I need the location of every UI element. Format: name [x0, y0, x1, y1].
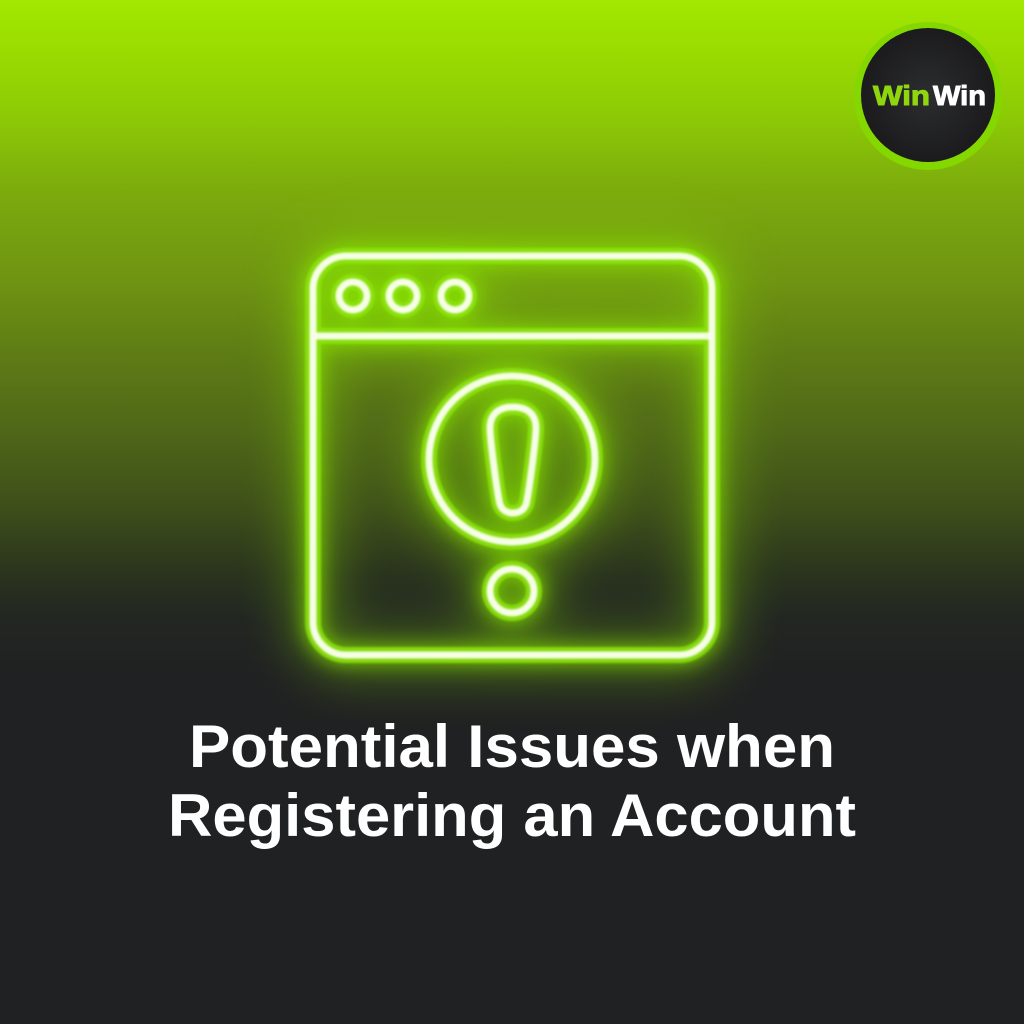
logo wordmark	[873, 80, 986, 111]
title: Potential Issues when	[189, 713, 835, 780]
logo badge	[854, 22, 1002, 170]
title: Registering an Account	[168, 782, 856, 849]
icon: browser window with warning	[313, 256, 712, 655]
title	[168, 713, 856, 849]
logo wordmark: Win	[933, 80, 986, 111]
logo wordmark: Win	[873, 80, 930, 111]
